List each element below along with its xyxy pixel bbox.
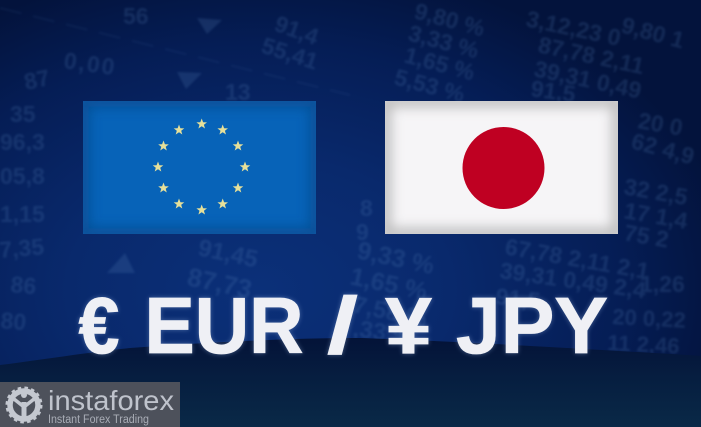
logo tagline: Instant Forex Trading (48, 414, 149, 426)
title glow: JPY (456, 281, 608, 370)
currency pair title (78, 281, 608, 370)
title glow: / (327, 281, 358, 370)
background market numbers: 20 0 (636, 107, 685, 141)
background market numbers: 3,33 % (406, 20, 482, 63)
background market numbers: 39,31 0,49 (532, 55, 644, 103)
background market numbers: 62 4,9 (629, 128, 697, 169)
logo gear icon (7, 388, 41, 422)
background market numbers: 96,3 (0, 129, 45, 155)
background triangles (107, 18, 222, 273)
title letters (78, 281, 608, 370)
background market numbers: ,33 % (351, 315, 416, 350)
euro flag (83, 101, 316, 234)
background market numbers: 1,26 (640, 271, 685, 297)
background market numbers: 75 2 (622, 219, 671, 253)
background market numbers: 13 (225, 79, 251, 105)
background market numbers: 55,41 (258, 32, 321, 75)
background market numbers: 67,78 2,11 2,1 (503, 233, 651, 284)
background market numbers: 91,5 (494, 283, 542, 314)
title letters: / (327, 281, 358, 370)
title letters: € (78, 281, 120, 370)
title letters: EUR (144, 281, 304, 370)
title glow: EUR (144, 281, 304, 370)
background market numbers: 9 (356, 219, 369, 245)
background market numbers: 86 (10, 271, 37, 299)
title letters: ¥ (385, 281, 433, 370)
title glow: € (78, 281, 120, 370)
background market numbers: 87 (22, 64, 52, 95)
background market numbers: 91,45 (196, 234, 260, 273)
background market numbers: 87,73 (185, 262, 255, 304)
background market numbers: 35 (10, 101, 36, 127)
japan flag vignette (385, 101, 618, 234)
dark hill (0, 338, 701, 427)
title glow: ¥ (385, 281, 433, 370)
background market numbers: 3,12,23 0 (524, 5, 623, 51)
instaforex logo panel (0, 382, 180, 427)
background market numbers: 39,31 0,49 2,4 (498, 257, 648, 303)
background market numbers: 91,4 (271, 10, 322, 50)
background market numbers: 1,65 % (402, 42, 478, 85)
flag red disc (462, 127, 544, 209)
background market numbers: 1,15 (0, 201, 45, 227)
euro flag vignette (83, 101, 316, 234)
background streak (0, 8, 350, 95)
background market numbers: 8 (360, 195, 373, 221)
background market numbers: 87,78 2,11 (536, 31, 647, 79)
flag stars (153, 118, 250, 214)
background market numbers: 11 2,46 (607, 330, 680, 359)
background market numbers: 56 (123, 3, 149, 29)
background market numbers: 0,00 (62, 47, 118, 80)
background market numbers: 9,80 1 (619, 12, 687, 53)
background market numbers: 20 0,22 (612, 304, 686, 333)
title glow (78, 281, 608, 370)
background market numbers: 91,5 (529, 75, 577, 107)
background market numbers: 1,65 % (348, 262, 430, 306)
background market numbers: 5,53 % (392, 64, 468, 107)
background market numbers: 80 (0, 307, 27, 335)
background market numbers: 9,33 % (355, 236, 437, 280)
title letters: JPY (456, 281, 608, 370)
background market numbers: 32 2,5 (622, 173, 690, 210)
japan flag (385, 101, 618, 234)
background market numbers: 17 1,4 (622, 197, 690, 234)
background market numbers: 05,8 (0, 163, 45, 189)
background market numbers: 7,58 % (351, 291, 429, 333)
logo wordmark: instaforex (48, 385, 174, 416)
